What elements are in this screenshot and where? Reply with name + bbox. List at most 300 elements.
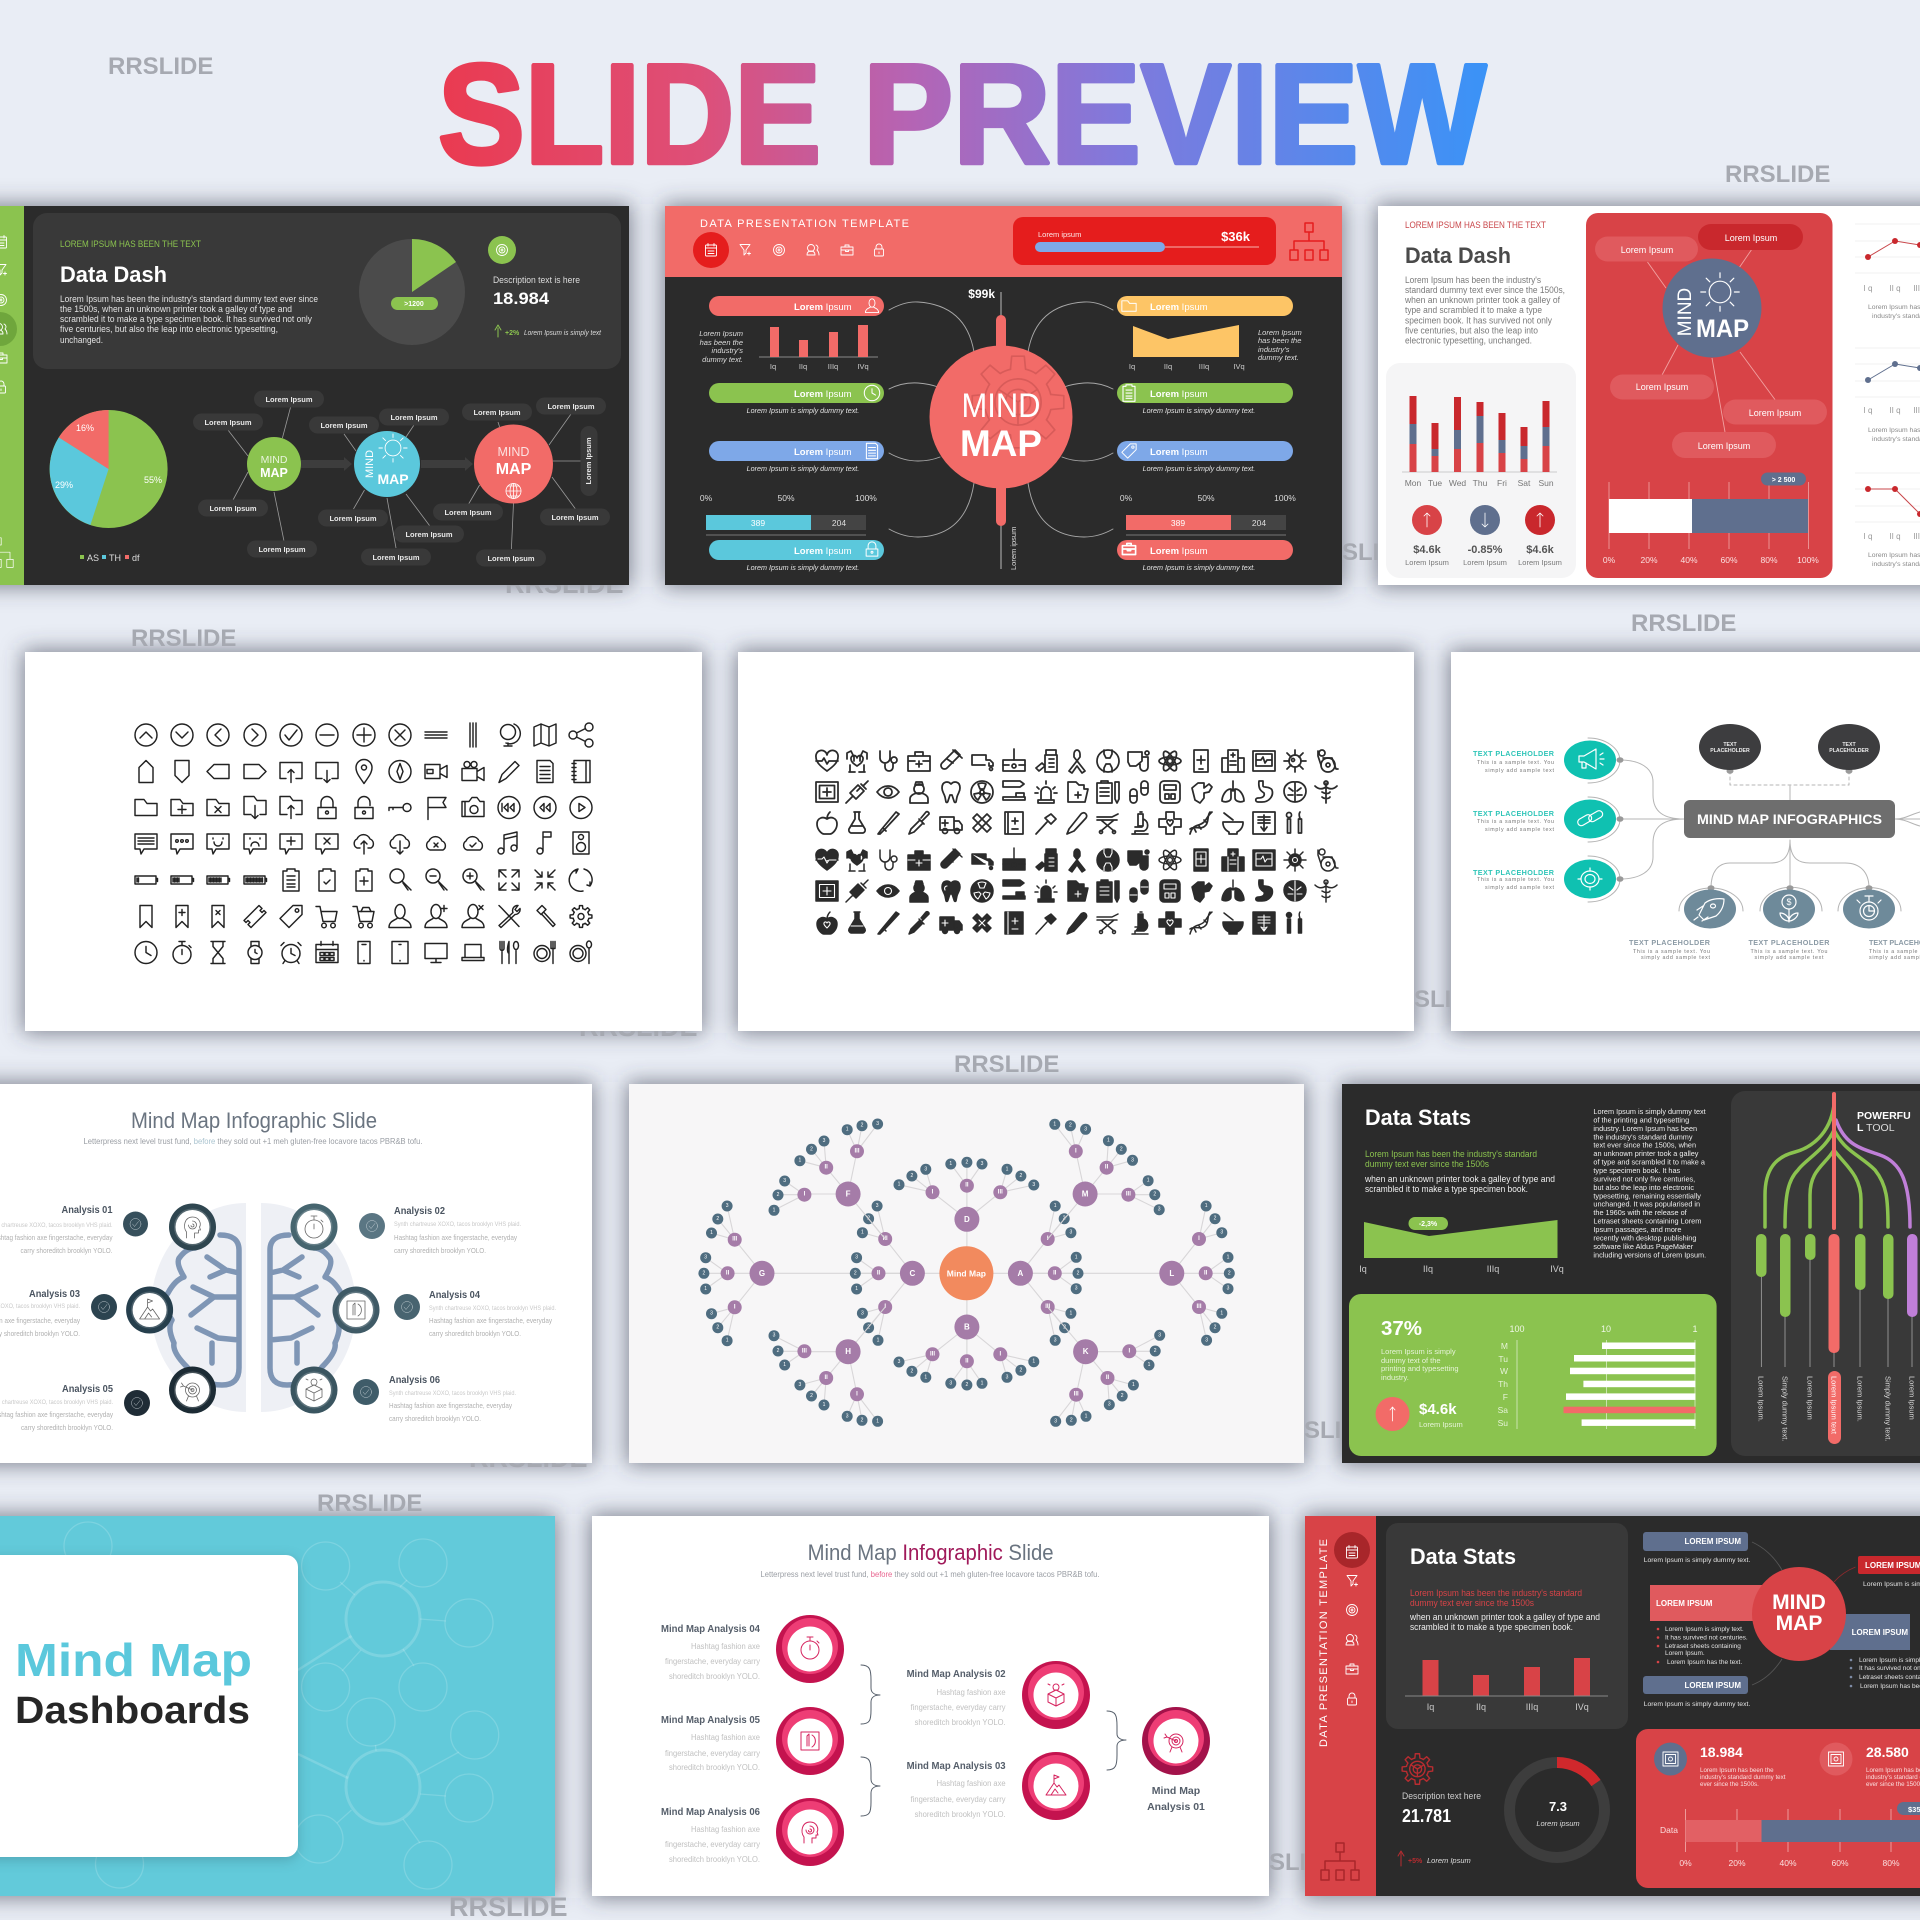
stacked bar panel: $4.6k — [1413, 544, 1442, 556]
red mind map panel: 0% — [1603, 555, 1616, 565]
mind map flow: Lorem Ipsum — [209, 504, 257, 513]
analysis labels left: Analysis 01 — [62, 1205, 113, 1216]
connectors — [1588, 738, 1920, 911]
branch H: III — [802, 1348, 807, 1354]
powerful tool panel — [1731, 1091, 1920, 1456]
dark nodes: TEXT — [1723, 742, 1737, 748]
mind map flow: MIND — [261, 454, 288, 466]
intro text — [1404, 220, 1565, 346]
curly brackets — [861, 1665, 1126, 1816]
mind map flow — [193, 390, 610, 566]
outline medical icons — [816, 749, 1338, 834]
green panel: $4.6k — [1419, 1401, 1457, 1418]
analysis labels right: Analysis 04 — [429, 1290, 480, 1301]
mind map with labels: Lorem Ipsum is simply text. — [1665, 1626, 1744, 1633]
branch L: 3 — [1220, 1230, 1223, 1236]
branch K: 3 — [1108, 1402, 1111, 1408]
mind map flow: Lorem Ipsum — [405, 530, 453, 539]
branch D: II — [965, 1183, 969, 1189]
analysis 01 label: Analysis 01 — [1147, 1801, 1205, 1813]
branch L: L — [1169, 1269, 1174, 1278]
powerful tool panel: Lorem Ipsum. — [1856, 1376, 1864, 1422]
mind map flow: Lorem Ipsum — [473, 408, 521, 417]
pie chart: 55% — [144, 475, 162, 485]
line charts: II q — [1889, 406, 1901, 415]
branch M: I — [1075, 1148, 1077, 1154]
branch K: II — [1106, 1375, 1109, 1381]
pill captions: Lorem Ipsum is simply dummy text. — [747, 464, 859, 473]
watermarks: RRSLIDE — [579, 1012, 698, 1042]
analysis labels left: Analysis 03 — [29, 1289, 80, 1300]
mind map flow: Lorem Ipsum — [320, 421, 368, 430]
red mind map panel: Lorem Ipsum — [1749, 408, 1801, 418]
branch B: 3 — [949, 1380, 952, 1386]
watermarks: RRSLIDE — [469, 1443, 588, 1473]
horizontal bars: M — [1501, 1341, 1508, 1351]
teal nodes: TEXT PLACEHOLDER — [1473, 868, 1555, 877]
powerful tool panel: POWERFU — [1857, 1110, 1911, 1122]
panel: slide 1 dark data dash — [0, 206, 629, 585]
area chart: Lorem Ipsum — [1258, 328, 1302, 337]
red sidebar — [1305, 1516, 1376, 1896]
horizontal bars: Th — [1498, 1379, 1508, 1389]
intro text: electronic typesetting, unchanged. — [1405, 336, 1532, 346]
analysis labels right: carry shoreditch brooklyn YOLO. — [389, 1414, 481, 1423]
mind map with labels: Lorem Ipsum is simply dummy text. — [1644, 1701, 1750, 1708]
right pills — [1117, 296, 1293, 560]
green panel: dummy text of the — [1381, 1356, 1441, 1365]
branch M: 3 — [1131, 1157, 1134, 1163]
mind map with labels: Lorem Ipsum. — [1665, 1650, 1705, 1657]
branch F: I — [804, 1192, 806, 1198]
center mind map: $99k — [968, 287, 995, 301]
white title card: Mind Map — [15, 1634, 252, 1686]
panel: slide 9 data stats — [1342, 1084, 1920, 1463]
branch L: 2 — [1214, 1216, 1217, 1222]
area chart: Iq — [1129, 362, 1135, 371]
data stats panel: IVq — [1575, 1702, 1589, 1712]
pie chart — [50, 410, 168, 563]
branch G: 2 — [716, 1325, 719, 1331]
analysis labels — [661, 1623, 1006, 1864]
branch D: I — [932, 1189, 934, 1195]
data stats panel: IIq — [1476, 1702, 1486, 1712]
branch C: 2 — [867, 1325, 870, 1331]
branch M: 3 — [1084, 1126, 1087, 1132]
dark nodes — [1699, 724, 1880, 770]
green panel: Lorem Ipsum is simply — [1381, 1347, 1456, 1356]
branch L: 1 — [1220, 1310, 1223, 1316]
mind map flow: Lorem Ipsum — [372, 553, 420, 562]
branch F: 2 — [810, 1146, 813, 1152]
branch L: 3 — [1227, 1286, 1230, 1292]
red stats panel — [1636, 1729, 1920, 1888]
powerful tool panel: Simply dummy text. — [1780, 1376, 1790, 1441]
dark nodes: PLACEHOLDER — [1710, 748, 1750, 754]
data stats panel: IIIq — [1526, 1702, 1538, 1712]
long paragraph: including versions of Lorem Ipsum. — [1593, 1250, 1706, 1259]
right stacked bar — [1120, 493, 1296, 535]
mind map with labels: LOREM IPSUM — [1852, 1628, 1908, 1637]
teal nodes: simply add sample text — [1485, 885, 1555, 891]
mind map flow: MAP — [496, 461, 532, 478]
area chart: IIq — [1164, 362, 1172, 371]
red mind map panel: 80% — [1760, 555, 1778, 565]
panel: slide 4 outline icon set — [25, 652, 702, 1031]
powerful tool panel: Simply dummy text. — [1884, 1376, 1892, 1441]
title: PREVIEW — [863, 35, 1486, 194]
area chart: IIIq — [1199, 362, 1209, 371]
analysis labels right: carry shoreditch brooklyn YOLO. — [394, 1246, 486, 1255]
header bar: Lorem ipsum — [1038, 230, 1081, 239]
connector curves — [889, 302, 1113, 537]
eyebrow: LOREM IPSUM HAS BEEN THE TEXT — [60, 239, 201, 250]
line charts: II q — [1889, 284, 1901, 293]
branch A: 2 — [1077, 1270, 1080, 1276]
solid medical icons — [816, 848, 1338, 934]
data stats panel: Iq — [1427, 1702, 1434, 1712]
branch C: 3 — [855, 1255, 858, 1261]
horizontal bars: Su — [1498, 1418, 1508, 1428]
title — [438, 35, 1486, 194]
horizontal bars: W — [1500, 1366, 1508, 1376]
area chart: -2,3% — [1419, 1221, 1438, 1228]
description stat: Lorem Ipsum — [1427, 1856, 1471, 1865]
intro text: scrambled it to make a type specimen book. — [1365, 1184, 1528, 1195]
stacked bar panel: Lorem Ipsum — [1405, 558, 1449, 567]
branch L: 2 — [1214, 1325, 1217, 1331]
red stats panel: 80% — [1882, 1858, 1900, 1868]
stacked bar panel: Sun — [1538, 478, 1554, 488]
teal nodes: This is a sample text. You — [1477, 819, 1554, 825]
bar chart: IVq — [857, 362, 869, 371]
panel: slide 5 medical icon set — [738, 652, 1414, 1031]
data stats panel — [1386, 1523, 1628, 1729]
right pills: Lorem Ipsum — [1150, 546, 1208, 557]
panel: slide 8 radial node tree — [629, 1084, 1304, 1463]
branch H — [768, 1307, 885, 1427]
intro text: LOREM IPSUM HAS BEEN THE TEXT — [1405, 220, 1546, 231]
left stacked bar — [700, 493, 877, 535]
long paragraph: text ever since the 1500s, when — [1593, 1141, 1696, 1150]
branch M: 3 — [1158, 1207, 1161, 1213]
branch D: 2 — [911, 1173, 914, 1179]
powerful tool panel: Lorem Ipsum — [1806, 1376, 1814, 1420]
branch B: 2 — [911, 1368, 914, 1374]
branch H: 3 — [799, 1382, 802, 1388]
pie chart: TH — [109, 553, 121, 563]
branch K: III — [1074, 1392, 1079, 1398]
right stacked bar: 204 — [1252, 518, 1266, 528]
teal nodes: simply add sample text — [1485, 827, 1555, 833]
paragraph: scrambled it to make a type specimen book. It has survived not only — [60, 314, 312, 324]
watermarks: SLIDE — [1269, 1849, 1340, 1876]
branch A: A — [1018, 1269, 1024, 1278]
analysis labels: Mind Map Analysis 05 — [661, 1714, 760, 1726]
branch C: 3 — [876, 1203, 879, 1209]
red mind map panel: 20% — [1640, 555, 1658, 565]
mind map flow: Lorem Ipsum — [551, 513, 599, 522]
watermarks: SLIDE — [1304, 1417, 1375, 1444]
branch G: G — [759, 1269, 765, 1278]
horizontal bars: Sa — [1498, 1405, 1508, 1415]
watermarks: RRSLIDE — [505, 569, 624, 599]
branch G: 2 — [716, 1216, 719, 1222]
left pills — [709, 296, 884, 560]
slate nodes: This is a sample text. You — [1633, 949, 1710, 955]
branch G: 1 — [726, 1338, 729, 1344]
analysis labels right: carry shoreditch brooklyn YOLO. — [429, 1329, 521, 1338]
red stats panel: Data — [1660, 1825, 1678, 1835]
stacked bar panel: Mon — [1405, 478, 1422, 488]
mind map with labels: MAP — [1776, 1612, 1822, 1635]
branch M: 2 — [1153, 1192, 1156, 1198]
long paragraph: of the printing and typesetting — [1593, 1116, 1689, 1124]
branch H: 3 — [846, 1413, 849, 1419]
teal nodes: TEXT PLACEHOLDER — [1473, 749, 1555, 758]
red mind map panel: 60% — [1720, 555, 1738, 565]
branch M: 1 — [1053, 1121, 1056, 1127]
branch H: 2 — [777, 1348, 780, 1354]
mind map with labels: LOREM IPSUM — [1656, 1599, 1713, 1608]
mind map with labels — [1643, 1532, 1920, 1708]
branch F: II — [825, 1165, 828, 1171]
center box — [1684, 800, 1895, 838]
branch F: 3 — [783, 1178, 786, 1184]
branch A: 1 — [1075, 1254, 1078, 1260]
branch H: 1 — [823, 1402, 826, 1408]
icon: gear — [1402, 1754, 1433, 1784]
stacked bar panel: Lorem Ipsum — [1463, 558, 1507, 567]
branch K: 1 — [1085, 1413, 1088, 1419]
mind map flow: Lorem Ipsum — [444, 508, 492, 517]
branch M: III — [1126, 1192, 1131, 1198]
branch F: 3 — [876, 1121, 879, 1127]
red mind map panel: > 2 500 — [1772, 477, 1795, 484]
branch H: 3 — [773, 1333, 776, 1339]
red stats panel: 0% — [1679, 1858, 1692, 1868]
branch B: 1 — [1032, 1359, 1035, 1365]
analysis labels left — [0, 1205, 113, 1432]
analysis labels: Hashtag fashion axe — [937, 1687, 1006, 1697]
branch B: III — [930, 1351, 935, 1357]
analysis labels left: carry shoreditch brooklyn YOLO. — [21, 1423, 113, 1432]
description stat: +5% — [1408, 1858, 1423, 1865]
branch D: 3 — [981, 1161, 984, 1167]
branch K: 2 — [1070, 1417, 1073, 1423]
analysis labels left: Analysis 05 — [62, 1384, 113, 1395]
branch G: 1 — [704, 1286, 707, 1292]
panel: slide 6 mind map infographics — [1451, 652, 1920, 1031]
analysis labels: Hashtag fashion axe — [937, 1778, 1006, 1788]
area chart: Iq — [1359, 1264, 1367, 1274]
right stacked bar: 0% — [1120, 493, 1133, 503]
branch C: 2 — [854, 1270, 857, 1276]
branch D: D — [964, 1215, 970, 1224]
check badges — [91, 1212, 420, 1416]
mind map flow: Lorem Ipsum — [329, 514, 377, 523]
branch A: 2 — [1063, 1325, 1066, 1331]
right stacked bar: 389 — [1171, 518, 1185, 528]
analysis labels: shoreditch brooklyn YOLO. — [669, 1671, 760, 1681]
stacked bar panel — [1386, 363, 1576, 578]
donut chart: Lorem ipsum — [1536, 1819, 1580, 1828]
mind map with labels: LOREM IPSUM — [1685, 1681, 1741, 1690]
area chart: IIq — [1423, 1264, 1433, 1274]
teal nodes: TEXT PLACEHOLDER — [1473, 809, 1555, 818]
branch M: II — [1105, 1165, 1109, 1171]
analysis labels: shoreditch brooklyn YOLO. — [669, 1854, 760, 1864]
red mind map panel: Lorem Ipsum — [1636, 382, 1688, 392]
long paragraph: software like Aldus PageMaker — [1593, 1242, 1694, 1251]
red mind map panel: MAP — [1696, 315, 1749, 343]
branch M: 1 — [1147, 1178, 1150, 1184]
title: SLIDE — [438, 35, 821, 194]
branch H: 1 — [876, 1418, 879, 1424]
branch C: 1 — [877, 1337, 880, 1343]
right pills: Lorem Ipsum — [1150, 389, 1208, 400]
white title card: Dashboards — [15, 1690, 250, 1732]
branch H: I — [856, 1391, 858, 1397]
panel: slide 7 brain mind map — [0, 1084, 592, 1463]
area chart: has been the — [1258, 336, 1301, 345]
branch K: I — [1128, 1348, 1130, 1354]
red mind map panel: Lorem Ipsum — [1725, 233, 1777, 243]
stat: +2% — [505, 330, 520, 337]
mind map flow: MIND — [498, 445, 529, 459]
branch F — [768, 1118, 885, 1239]
branch G: 3 — [710, 1311, 713, 1317]
ring nodes — [776, 1615, 1210, 1866]
branch L: 1 — [1205, 1203, 1208, 1209]
branch G: 3 — [704, 1255, 707, 1261]
branch F: 1 — [846, 1127, 849, 1133]
area chart — [1129, 325, 1302, 371]
header bar: DATA PRESENTATION TEMPLATE — [700, 218, 909, 230]
stacked bar panel: Sat — [1518, 478, 1531, 488]
donut chart — [1510, 1762, 1604, 1858]
intro text: five centuries, but also the leap into — [1405, 326, 1538, 336]
intro text: dummy text ever since the 1500s — [1365, 1159, 1489, 1170]
branch C: 1 — [855, 1286, 858, 1292]
heading: Mind Map Infographic Slide — [131, 1108, 377, 1133]
stacked bar panel: -0.85% — [1468, 544, 1503, 556]
right stacked bar: 100% — [1274, 493, 1296, 503]
branch K: 1 — [1148, 1362, 1151, 1368]
slate nodes: TEXT PLACEHOLDER — [1748, 938, 1830, 947]
branch D — [894, 1157, 1039, 1232]
analysis labels: fingerstache, everyday carry — [665, 1656, 761, 1666]
branch M: M — [1082, 1190, 1089, 1198]
branch K: 2 — [1121, 1393, 1124, 1399]
panel: slide 3 white data dash — [1378, 206, 1920, 585]
long paragraph: the industry's standard dummy — [1593, 1132, 1693, 1141]
branch C: III — [883, 1236, 888, 1242]
bar chart: Lorem Ipsum — [699, 329, 743, 338]
stacked bar panel: Thu — [1473, 478, 1488, 488]
red stats panel: industry's standard dummy text — [1700, 1774, 1786, 1781]
mind map with labels: Lorem Ipsum has the text. — [1667, 1659, 1742, 1666]
description stat: 21.781 — [1402, 1806, 1451, 1826]
stacked bar panel: $4.6k — [1526, 544, 1555, 556]
teal nodes — [1473, 740, 1616, 898]
left stacked bar: 100% — [855, 493, 877, 503]
analysis labels right: Hashtag fashion axe fingerstache, everyday — [389, 1401, 512, 1410]
mind map with labels: MIND — [1772, 1591, 1826, 1614]
branch K: 3 — [1158, 1332, 1161, 1338]
powerful tool panel: Lorem Ipsum text — [1830, 1376, 1838, 1435]
branch C: I — [884, 1304, 886, 1310]
red sidebar: DATA PRESENTATION TEMPLATE — [1318, 1539, 1330, 1747]
pie chart: 29% — [55, 480, 73, 490]
green panel: printing and typesetting — [1381, 1364, 1459, 1373]
bar chart: IIIq — [828, 362, 838, 371]
branch G: 1 — [710, 1230, 713, 1236]
branch C: 1 — [861, 1230, 864, 1236]
branch M: 2 — [1120, 1146, 1123, 1152]
branch F: 1 — [799, 1158, 802, 1164]
long paragraph: Ipsum passages, and more — [1593, 1225, 1681, 1234]
branch B: 2 — [966, 1382, 969, 1388]
branch A: 3 — [1075, 1286, 1078, 1292]
long paragraph: industry. Lorem Ipsum has been — [1593, 1124, 1697, 1133]
line charts: I q — [1864, 284, 1872, 293]
powerful tool panel: L TOOL — [1857, 1122, 1895, 1134]
long paragraph — [1593, 1107, 1706, 1259]
mind map flow: Lorem Ipsum — [258, 545, 306, 554]
watermarks: SLIDE — [1414, 986, 1485, 1013]
green panel: Lorem Ipsum — [1419, 1420, 1463, 1429]
panel: slide 10 mind map dashboards cover — [0, 1516, 555, 1896]
watermarks: RRSLIDE — [131, 625, 236, 652]
bar chart — [699, 325, 878, 371]
branch L: 2 — [1228, 1270, 1231, 1276]
watermarks: SLIDE — [1342, 539, 1413, 566]
slate nodes: simply add sample text — [1754, 955, 1824, 961]
branch D: III — [998, 1189, 1003, 1195]
center mind map: MAP — [960, 423, 1042, 464]
area chart — [1359, 1217, 1564, 1274]
analysis labels: shoreditch brooklyn YOLO. — [915, 1809, 1006, 1819]
data stats panel: Data Stats — [1410, 1544, 1516, 1569]
pie chart: AS — [87, 553, 99, 563]
icon: target badge — [488, 236, 516, 264]
analysis labels: fingerstache, everyday carry — [665, 1748, 761, 1758]
branch H: 2 — [810, 1393, 813, 1399]
long paragraph: recently with desktop publishing — [1593, 1233, 1696, 1242]
analysis labels right: Hashtag fashion axe fingerstache, everyday — [394, 1233, 517, 1242]
pie chart: df — [132, 553, 140, 563]
watermarks: RRSLIDE — [1631, 610, 1736, 637]
area chart: dummy text. — [1258, 353, 1299, 362]
left pills: Lorem Ipsum — [794, 447, 852, 458]
center mind map: Lorem ipsum — [1009, 527, 1018, 570]
intro text: Data Dash — [1405, 243, 1511, 268]
top panel — [33, 213, 621, 369]
branch A: III — [1045, 1304, 1051, 1310]
mind map flow: Lorem Ipsum — [584, 437, 593, 485]
data stats panel: when an unknown printer took a galley of type and — [1409, 1612, 1600, 1623]
branch K: 3 — [1054, 1418, 1057, 1424]
branch D: 3 — [924, 1166, 927, 1172]
red mind map panel: MIND — [1675, 288, 1696, 336]
long paragraph: Letraset sheets containing Lorem — [1593, 1217, 1701, 1226]
branch B: 3 — [1006, 1374, 1009, 1380]
branch A: II — [1053, 1270, 1057, 1276]
green panel — [1349, 1294, 1717, 1456]
data stats panel: scrambled it to make a type specimen book. — [1410, 1622, 1573, 1633]
branch M: 1 — [1107, 1138, 1110, 1144]
